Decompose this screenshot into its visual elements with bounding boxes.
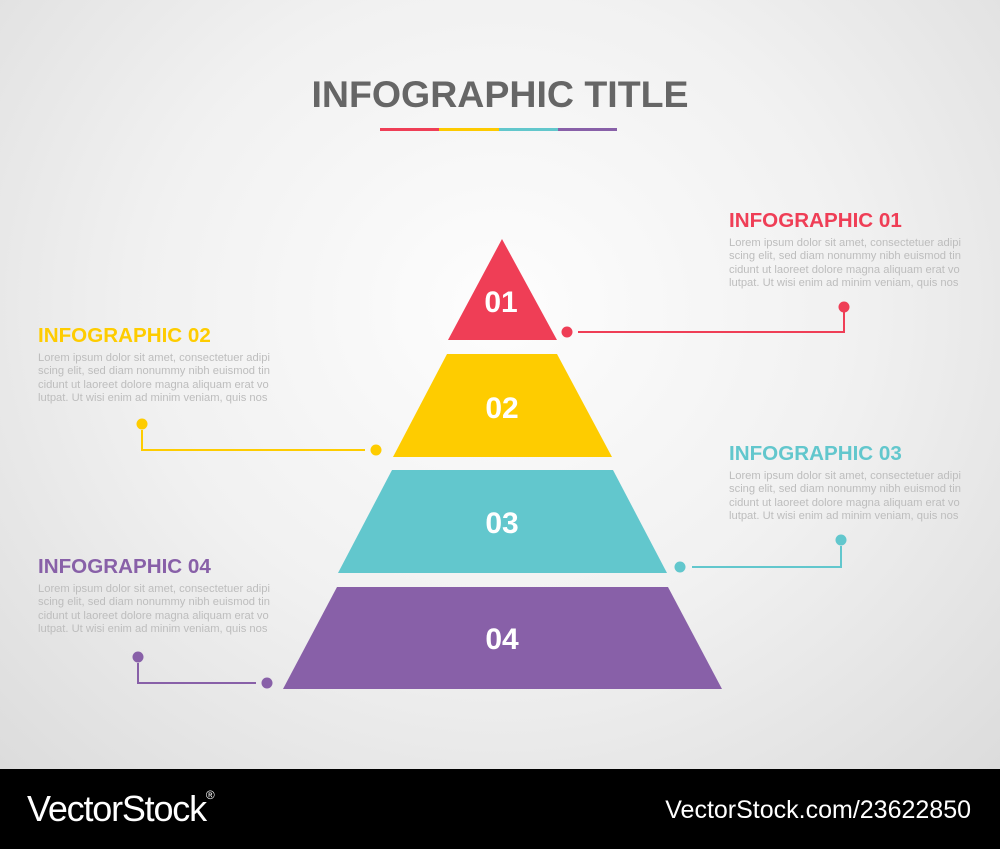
text block 01 xyxy=(729,209,961,289)
text block 04 xyxy=(38,555,270,635)
title: INFOGRAPHIC TITLE xyxy=(311,73,689,115)
layer 02 xyxy=(393,354,612,457)
footer url: VectorStock.com/23622850 xyxy=(665,796,971,824)
connector 01 xyxy=(562,302,850,338)
heading 02: INFOGRAPHIC 02 xyxy=(38,324,211,347)
heading 03: INFOGRAPHIC 03 xyxy=(729,442,902,465)
layer 03: 03 xyxy=(485,507,519,540)
layer 01 xyxy=(448,239,557,340)
body 02 xyxy=(38,352,270,404)
body 04: scing elit, sed diam nonummy nibh euismod tin xyxy=(38,596,270,608)
connector 02 xyxy=(136,418,382,456)
layer 02: 02 xyxy=(485,392,519,425)
body 02: scing elit, sed diam nonummy nibh euismod tin xyxy=(38,365,270,377)
title underline xyxy=(380,128,617,131)
body 01: Lorem ipsum dolor sit amet, consectetuer adipi xyxy=(729,237,961,249)
layer 04: 04 xyxy=(485,623,519,656)
layer 01: 01 xyxy=(484,286,518,319)
body 02: Lorem ipsum dolor sit amet, consectetuer adipi xyxy=(38,352,270,364)
body 01 xyxy=(729,237,961,289)
heading 04: INFOGRAPHIC 04 xyxy=(38,555,211,578)
body 03: cidunt ut laoreet dolore magna aliquam erat vo xyxy=(729,497,960,509)
body 04: Lorem ipsum dolor sit amet, consectetuer adipi xyxy=(38,583,270,595)
body 02: lutpat. Ut wisi enim ad minim veniam, quis nos xyxy=(38,392,267,404)
body 03: Lorem ipsum dolor sit amet, consectetuer adipi xyxy=(729,470,961,482)
body 01: scing elit, sed diam nonummy nibh euismod tin xyxy=(729,250,961,262)
layer 03 xyxy=(338,470,667,573)
connector 03 xyxy=(674,534,846,572)
body 01: cidunt ut laoreet dolore magna aliquam erat vo xyxy=(729,264,960,276)
body 03: lutpat. Ut wisi enim ad minim veniam, quis nos xyxy=(729,510,958,522)
body 04: lutpat. Ut wisi enim ad minim veniam, quis nos xyxy=(38,623,267,635)
body 03 xyxy=(729,470,961,522)
body 04: cidunt ut laoreet dolore magna aliquam erat vo xyxy=(38,610,269,622)
heading 01: INFOGRAPHIC 01 xyxy=(729,209,902,232)
text block 03 xyxy=(729,442,961,522)
layer 04 xyxy=(283,587,722,689)
text block 02 xyxy=(38,324,270,404)
connector 04 xyxy=(132,652,272,688)
body 04 xyxy=(38,583,270,635)
body 03: scing elit, sed diam nonummy nibh euismod tin xyxy=(729,483,961,495)
body 02: cidunt ut laoreet dolore magna aliquam erat vo xyxy=(38,379,269,391)
body 01: lutpat. Ut wisi enim ad minim veniam, quis nos xyxy=(729,277,958,289)
footer logo: VectorStock® xyxy=(27,788,214,829)
footer bar xyxy=(0,769,1000,849)
